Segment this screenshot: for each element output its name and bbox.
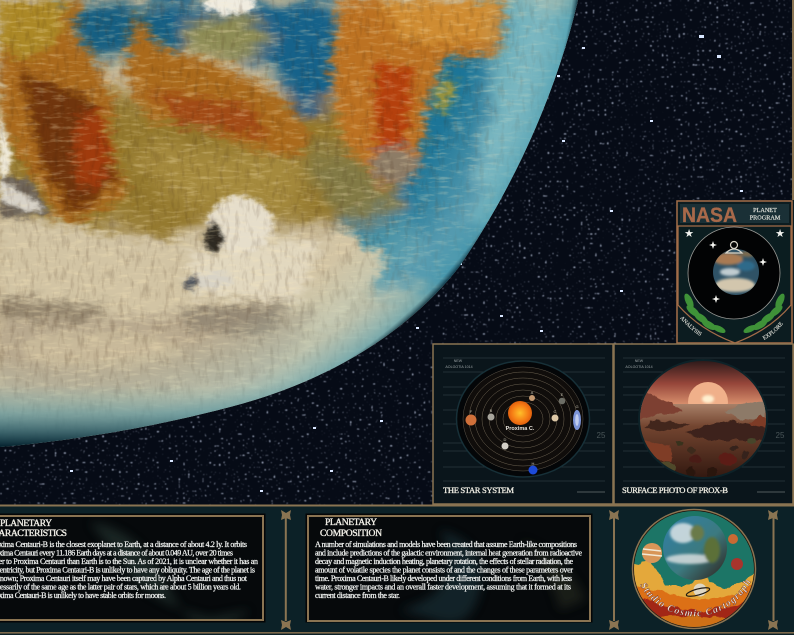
badge curved labels: ANALYSIS [680, 316, 702, 336]
corner microtext: AOLGOTIA 1014 [445, 365, 473, 369]
badge stars: ★ [684, 228, 694, 240]
fibrous surface texture [0, 0, 570, 418]
body text: and include predictions of the galactic environment, internal heat generation from radioactive [315, 548, 582, 558]
planet [0, 0, 600, 460]
body text [315, 540, 582, 600]
seal lettering: Studio Cosmic Cartographics [640, 580, 751, 616]
seal jupiter [642, 543, 662, 563]
panel: star system [433, 344, 613, 504]
corner microtext: AOLGOTIA 1014 [625, 365, 653, 369]
badge stars: ★ [775, 228, 785, 240]
heading: PLANETARY [0, 518, 52, 529]
laurel branches [682, 292, 787, 335]
studio seal [632, 508, 756, 630]
seal small planets [728, 534, 743, 570]
shield outline [678, 226, 791, 343]
heading [0, 518, 67, 539]
body text [0, 540, 258, 600]
caption: SURFACE PHOTO OF PROX-B [622, 485, 728, 495]
ornament column middle [609, 510, 619, 630]
NASA logotype: NASA [682, 204, 737, 227]
corner microtext: NEW [454, 359, 463, 363]
heading: COMPOSITION [320, 528, 382, 539]
badge stars [684, 228, 785, 303]
small planet [713, 249, 759, 295]
badge curved labels: EXPLORE [762, 322, 783, 340]
program label: PROGRAM [750, 214, 781, 222]
page number: 25 [597, 431, 606, 440]
heading [320, 517, 382, 539]
central star [508, 401, 532, 425]
panel: planetary composition [306, 514, 592, 623]
badge circle [688, 227, 780, 319]
body text: current distance from the star. [315, 591, 400, 600]
bottom strip [0, 504, 794, 635]
body text: time. Proxima Centauri-B likely developed under different conditions from Earth, with less [315, 574, 572, 583]
cloud formations [0, 0, 273, 289]
surface landscape [638, 359, 768, 479]
corner microtext: NEW [635, 359, 644, 363]
badge curved labels [680, 316, 783, 340]
body text: decay and magnetic induction heating, planetary rotation, the effects of stellar radiation, the [315, 557, 573, 566]
program label: PLANET [753, 207, 777, 214]
body text: A number of simulations and models have been created that assume Earth-like compositions [315, 540, 577, 549]
helmet emblem [726, 242, 742, 253]
panel: surface photo [614, 344, 793, 504]
planets: E [561, 392, 564, 397]
planets: F [470, 409, 473, 414]
corner microtext [625, 359, 653, 369]
body text: water, stronger impacts and an overall faster development, assuming that it formed at its [315, 582, 571, 592]
seal earth [663, 516, 727, 580]
corner microtext [445, 359, 473, 369]
seal saturn [686, 584, 710, 598]
program label [750, 207, 781, 222]
right edge gold rule [792, 0, 794, 505]
planets: D [504, 437, 507, 442]
mission badge [676, 200, 794, 344]
planets [466, 390, 581, 474]
body text: amount of volatile species the planet consists of and the changes of these parameters over [315, 566, 573, 574]
ornament column left [281, 510, 291, 630]
planets: H [532, 461, 535, 466]
seal clouds [634, 560, 754, 627]
planets: C [554, 409, 557, 414]
planets: G [575, 404, 579, 409]
panel: planetary characteristics [0, 514, 265, 627]
caption: THE STAR SYSTEM [443, 485, 514, 495]
planets: B [490, 408, 493, 413]
star label: Proxima C. [506, 426, 535, 432]
ornament column right [768, 510, 778, 630]
page number: 25 [776, 431, 785, 440]
heading: PLANETARY [325, 517, 377, 528]
planets: A [531, 390, 534, 395]
orbit diagram [456, 361, 590, 477]
